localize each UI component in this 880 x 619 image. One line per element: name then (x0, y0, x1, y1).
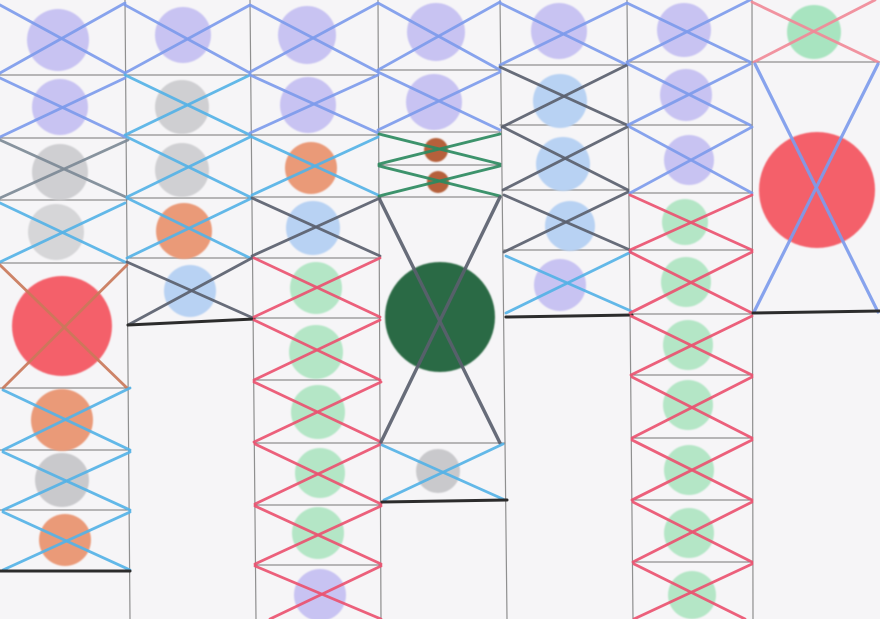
column 5 (500, 3, 632, 317)
column 3 (250, 3, 381, 619)
column 4 (378, 2, 507, 502)
column 2 (125, 5, 254, 325)
column 6 (627, 0, 752, 619)
column 7 (752, 0, 880, 313)
column 1 (0, 3, 130, 571)
